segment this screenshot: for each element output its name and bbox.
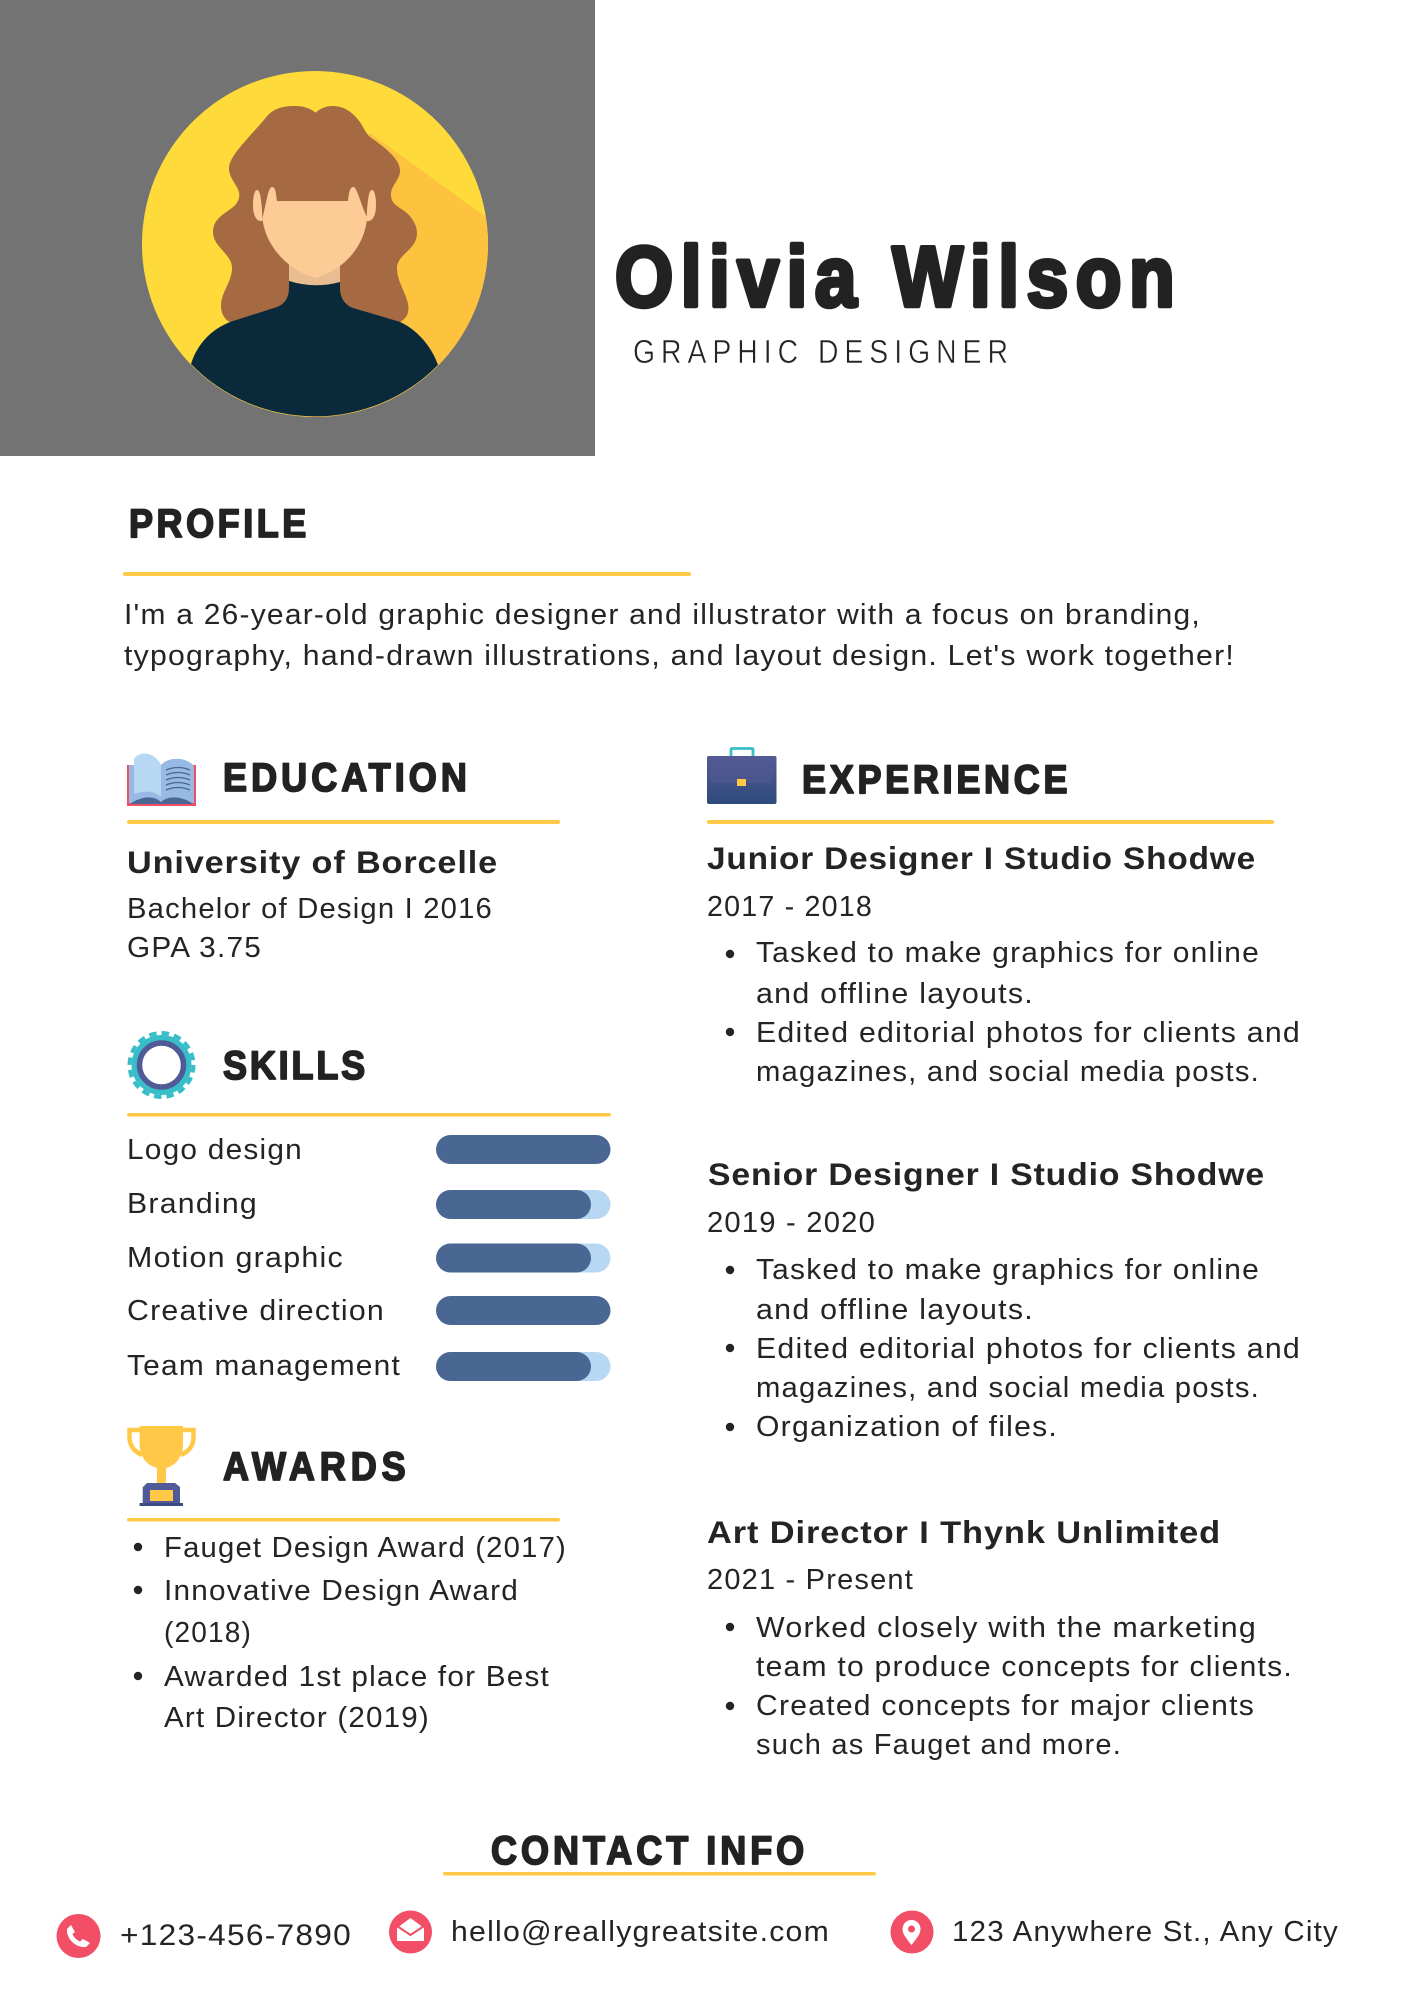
- job: junior designer: [707, 840, 1301, 1088]
- skill: creative direction: Creative direction: [127, 1295, 385, 1327]
- heading: skills: SKILLS: [223, 1044, 365, 1088]
- skill: motion graphic: Motion graphic: [127, 1242, 344, 1274]
- heading: education: EDUCATION: [223, 756, 467, 800]
- heading: contact info: CONTACT INFO: [491, 1829, 804, 1873]
- skill: branding: Branding: [127, 1188, 258, 1220]
- panel: awards: [127, 1426, 567, 1734]
- job: senior designer: and offline layouts.: [756, 1294, 1034, 1326]
- job: art director: Worked closely with the marketing: [756, 1612, 1257, 1644]
- icon: briefcase: [707, 748, 776, 804]
- job: junior designer: Edited editorial photos for clients and: [756, 1017, 1301, 1049]
- text: school: University of Borcelle: [127, 844, 498, 880]
- job: junior designer: 2017 - 2018: [707, 891, 873, 923]
- job: senior designer: Tasked to make graphics for online: [756, 1254, 1260, 1286]
- skill: logo design: Logo design: [127, 1134, 303, 1166]
- job: senior designer: Edited editorial photos for clients and: [756, 1333, 1301, 1365]
- contact: phone: [56, 1914, 352, 1958]
- heading: profile: PROFILE: [129, 502, 306, 546]
- job: art director: Created concepts for major clients: [756, 1690, 1255, 1722]
- contact: email: hello@reallygreatsite.com: [451, 1916, 830, 1948]
- skill: motion graphic: [127, 1242, 610, 1274]
- job: art director: such as Fauget and more.: [756, 1729, 1122, 1761]
- job: senior designer: Organization of files.: [756, 1411, 1058, 1443]
- job: junior designer: and offline layouts.: [756, 978, 1034, 1010]
- job: senior designer: Senior Designer I Studio Shodwe: [708, 1156, 1265, 1192]
- text: degree: Bachelor of Design I 2016: [127, 893, 493, 925]
- subtitle: job title: GRAPHIC DESIGNER: [633, 333, 1008, 371]
- skill: branding: [127, 1188, 610, 1220]
- panel: profile: [123, 502, 1235, 672]
- panel: skills: [127, 1033, 611, 1382]
- list: awards: (2018): [164, 1617, 252, 1649]
- panel: experience: [707, 748, 1301, 1761]
- skill: team management: Team management: [127, 1350, 401, 1382]
- text: gpa: GPA 3.75: [127, 932, 262, 964]
- skill: creative direction: [127, 1295, 610, 1327]
- text: profile paragraph: typography, hand-drawn illustrations, and layout design. Let's work together!: [124, 640, 1235, 672]
- icon: trophy: [130, 1426, 194, 1506]
- icon: gear: [130, 1033, 194, 1097]
- list: awards: Innovative Design Award: [164, 1575, 519, 1607]
- job: art director: Art Director I Thynk Unlimited: [707, 1514, 1221, 1550]
- job: junior designer: Tasked to make graphics for online: [756, 937, 1260, 969]
- job: art director: 2021 - Present: [707, 1564, 914, 1596]
- skill: logo design: [127, 1134, 610, 1166]
- panel: education: [127, 753, 560, 964]
- list: awards: Art Director (2019): [164, 1702, 430, 1734]
- job: art director: [707, 1514, 1293, 1761]
- list: awards: Awarded 1st place for Best: [164, 1661, 550, 1693]
- text: profile paragraph: [124, 599, 1235, 672]
- job: senior designer: magazines, and social media posts.: [756, 1372, 1260, 1404]
- contact: phone: +123-456-7890: [120, 1919, 352, 1952]
- text: profile paragraph: I'm a 26-year-old graphic designer and illustrator with a focus on branding,: [124, 599, 1201, 631]
- icon: avatar portrait: [142, 71, 495, 420]
- contact: address: [890, 1910, 1339, 1954]
- title: name: Olivia Wilson: [615, 230, 1175, 324]
- job: senior designer: [707, 1156, 1301, 1443]
- list: awards: [134, 1532, 567, 1734]
- job: junior designer: Junior Designer I Studio Shodwe: [707, 840, 1256, 876]
- panel: contact info: [56, 1829, 1339, 1958]
- job: senior designer: 2019 - 2020: [707, 1207, 876, 1239]
- skill: team management: [127, 1350, 610, 1382]
- heading: experience: EXPERIENCE: [802, 758, 1068, 802]
- contact: address: 123 Anywhere St., Any City: [952, 1916, 1339, 1948]
- list: awards: Fauget Design Award (2017): [164, 1532, 567, 1564]
- job: junior designer: magazines, and social media posts.: [756, 1056, 1260, 1088]
- icon: open book: [127, 753, 196, 806]
- panel: portrait header: [0, 0, 595, 456]
- contact: email: [389, 1910, 830, 1954]
- heading: awards: AWARDS: [223, 1445, 406, 1489]
- job: art director: team to produce concepts for clients.: [756, 1651, 1293, 1683]
